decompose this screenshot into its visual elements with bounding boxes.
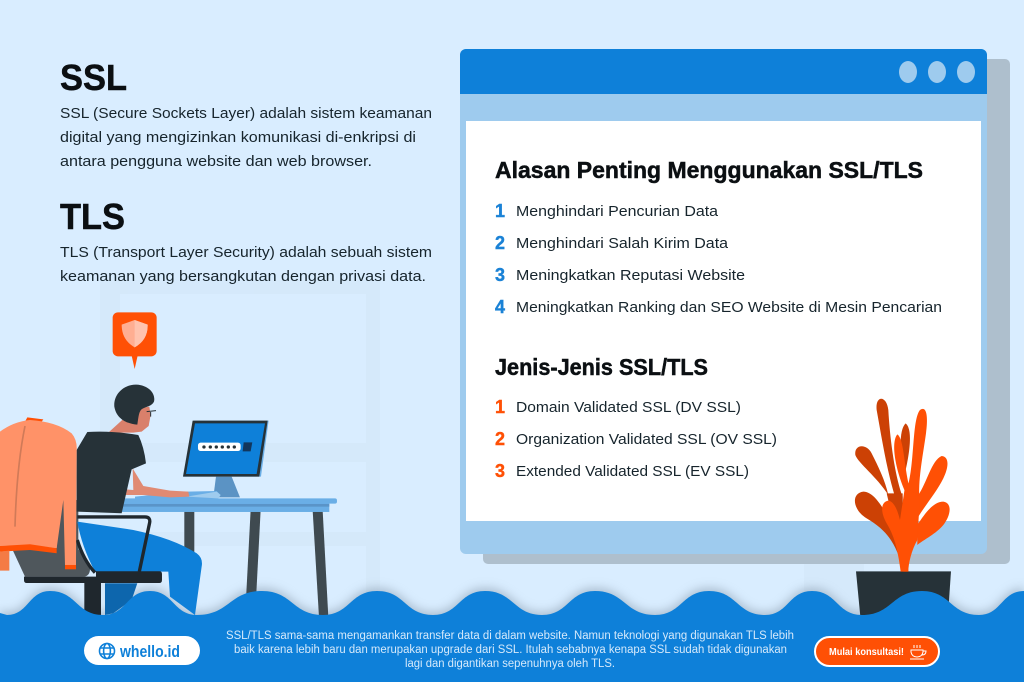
heading: types: Jenis-Jenis SSL/TLS (495, 354, 708, 380)
plant pot (856, 571, 951, 620)
keyboard (135, 491, 221, 500)
jacket (0, 417, 77, 571)
list: reasons: 1 (495, 201, 505, 221)
window shadow (483, 59, 1010, 564)
hair (114, 385, 154, 425)
list: reasons: Meningkatkan Ranking dan SEO Website di Mesin Pencarian (516, 299, 942, 316)
heading: SSL: SSL (60, 57, 127, 98)
wave shadow (0, 588, 1024, 637)
heading: reasons: Alasan Penting Menggunakan SSL/TLS (495, 157, 923, 183)
chair back (57, 500, 78, 567)
text block: SSL description: SSL (Secure Sockets Layer) adalah sistem keamanan (60, 105, 432, 122)
text block: SSL description: digital yang mengizinkan komunikasi di-enkripsi di (60, 129, 416, 146)
list: types: Organization Validated SSL (OV SSL) (516, 431, 777, 448)
text block: SSL description (60, 105, 432, 170)
button: Mulai konsultasi: Mulai konsultasi! (829, 646, 904, 658)
desk (122, 498, 337, 512)
desk legs (184, 510, 328, 617)
password field (198, 442, 252, 451)
icon: globe (100, 644, 114, 658)
list: types: 2 (495, 429, 505, 449)
glasses (147, 411, 156, 417)
text block: TLS description: TLS (Transport Layer Security) adalah sebuah sistem (60, 244, 432, 261)
list: reasons (495, 201, 942, 317)
logo pill: whello.id (84, 636, 200, 665)
text block: TLS description: keamanan yang bersangkutan dengan privasi data. (60, 268, 426, 285)
window title bar (460, 49, 987, 94)
security speech bubble (113, 312, 157, 369)
list: reasons: Menghindari Pencurian Data (516, 203, 719, 220)
monitor stand (213, 477, 240, 497)
arm (125, 468, 189, 497)
monitor (183, 421, 269, 477)
neck and face (108, 407, 151, 433)
list: types: Extended Validated SSL (EV SSL) (516, 463, 749, 480)
pants (77, 522, 202, 615)
footer text (226, 630, 794, 670)
list: types (495, 397, 777, 481)
button: Mulai konsultasi (815, 637, 939, 666)
footer text: lagi dan digantikan sepenuhnya oleh TLS. (405, 658, 615, 670)
window body (460, 49, 987, 554)
list: types: 3 (495, 461, 505, 481)
heading: TLS: TLS (60, 196, 125, 237)
text block: TLS description (60, 244, 432, 285)
list: reasons: 2 (495, 233, 505, 253)
list: reasons: 4 (495, 297, 505, 317)
icon: coffee cup (910, 645, 926, 659)
t-shirt (77, 432, 146, 513)
window control dots (899, 61, 975, 83)
text block: SSL description: antara pengguna website dan web browser. (60, 153, 372, 170)
list: reasons: Meningkatkan Reputasi Website (516, 267, 745, 284)
list: reasons: Menghindari Salah Kirim Data (516, 235, 729, 252)
footer text: SSL/TLS sama-sama mengamankan transfer data di dalam website. Namun teknologi yang digunakan TLS lebih (226, 630, 794, 642)
content panel (466, 121, 981, 521)
footer band with waves (0, 591, 1024, 682)
illustration: person at desk (0, 312, 337, 617)
list: types: Domain Validated SSL (DV SSL) (516, 399, 741, 416)
illustration: plant (855, 399, 951, 620)
panel: browser window (460, 49, 1010, 564)
list: reasons: 3 (495, 265, 505, 285)
logo pill: whello.id: whello.id (119, 643, 180, 661)
chair (13, 517, 162, 615)
list: types: 1 (495, 397, 505, 417)
footer text: baik karena lebih baru dan merupakan upgrade dari SSL. Itulah sebabnya kenapa SSL sudah tidak digunakan (234, 644, 787, 656)
